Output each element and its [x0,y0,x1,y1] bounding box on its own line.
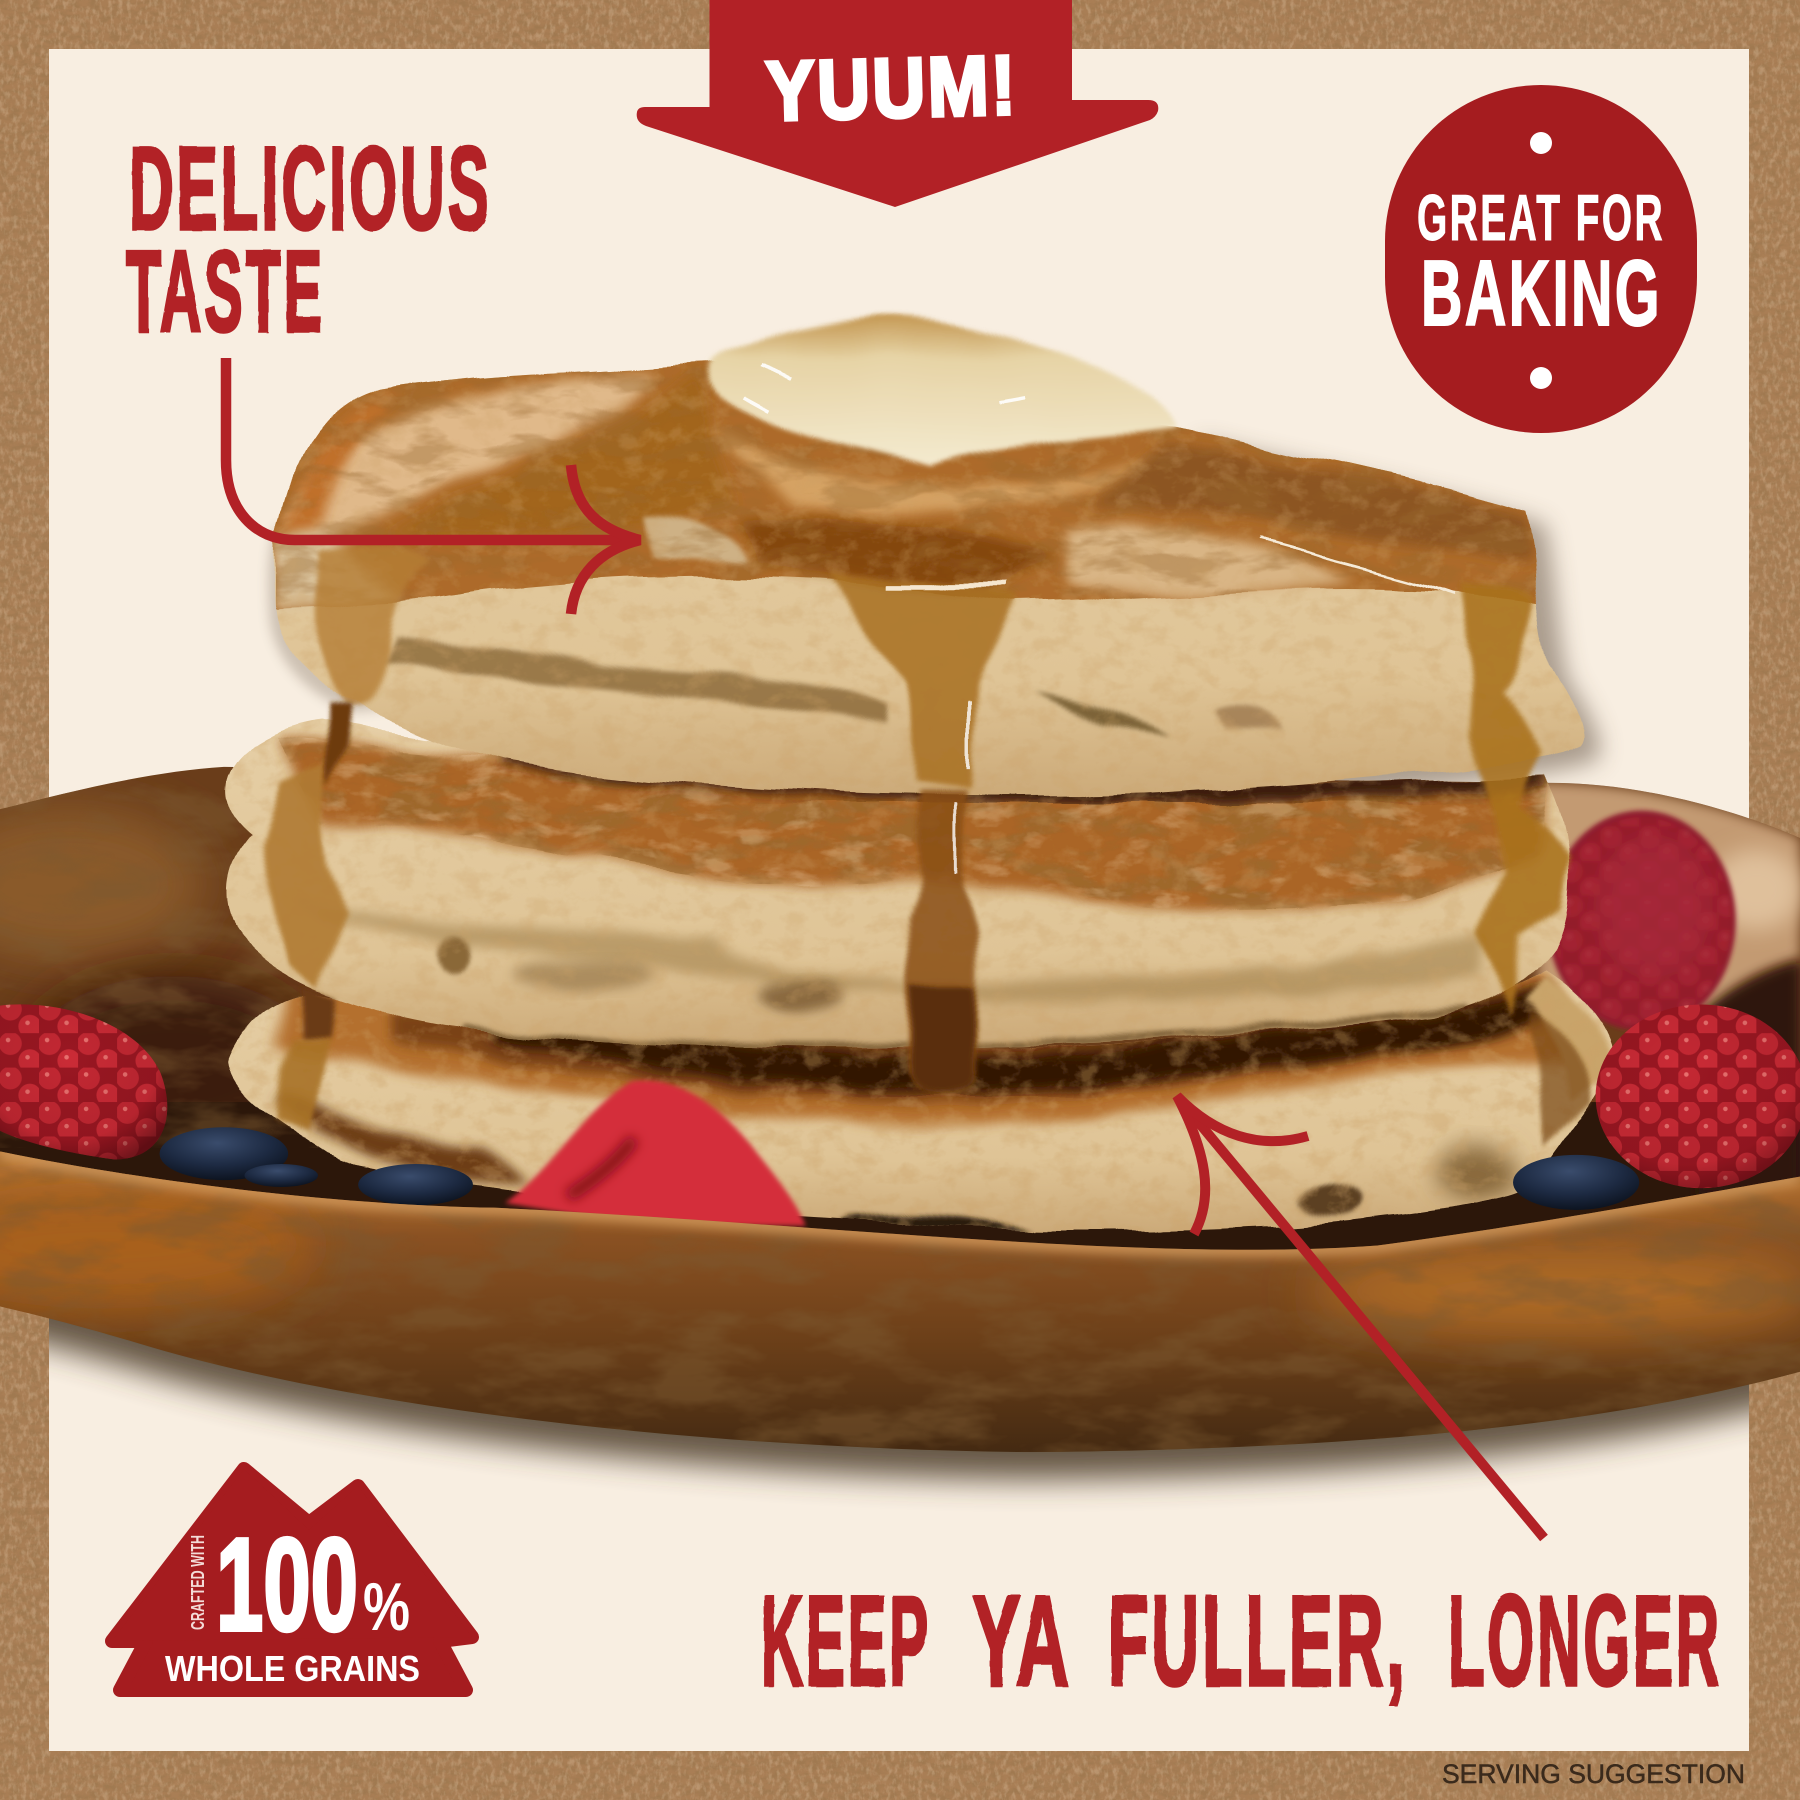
badge: 100% whole grains: % [363,1569,410,1645]
badge: great for baking [1385,85,1697,433]
heading: keep ya fuller, longer: KEEP [761,1570,931,1713]
top pancake [264,356,1607,815]
banner arrow: YUUM! [637,0,1158,207]
badge: 100% whole grains: CRAFTED WITH [188,1535,208,1630]
arrow: fuller longer pointer [1177,1096,1544,1538]
plate front rim [0,1136,1800,1469]
heading: delicious taste [126,123,492,356]
plate and stack shadows on panel [0,441,1800,1480]
raspberries [0,1004,1800,1226]
banner text: YUUM! [765,38,1019,138]
badge: 100% whole grains: WHOLE GRAINS [165,1648,420,1689]
syrup drips [262,540,1596,1148]
heading: delicious taste: DELICIOUS [129,123,492,255]
bottom pancake [218,964,1630,1240]
heading: keep ya fuller, longer: YA [972,1570,1071,1713]
photo: pancake stack on wooden plate [0,310,1800,1452]
pancake stack with syrup [218,317,1630,1240]
arrow: delicious taste pointer [226,358,640,614]
butter pat [709,317,1182,466]
back raspberry right [1547,810,1736,1031]
heading: delicious taste: TASTE [126,228,325,356]
heading: keep ya fuller, longer: FULLER, [1108,1570,1408,1713]
heading: keep ya fuller, longer [761,1570,1722,1713]
plate interior [0,766,1800,1250]
footnote: serving suggestion: SERVING SUGGESTION [1442,1759,1745,1789]
blueberries [160,1127,1639,1210]
middle pancake [218,712,1596,1056]
badge: 100% whole grains: 100 [216,1511,358,1658]
badge: 100% whole grains [112,1469,472,1690]
